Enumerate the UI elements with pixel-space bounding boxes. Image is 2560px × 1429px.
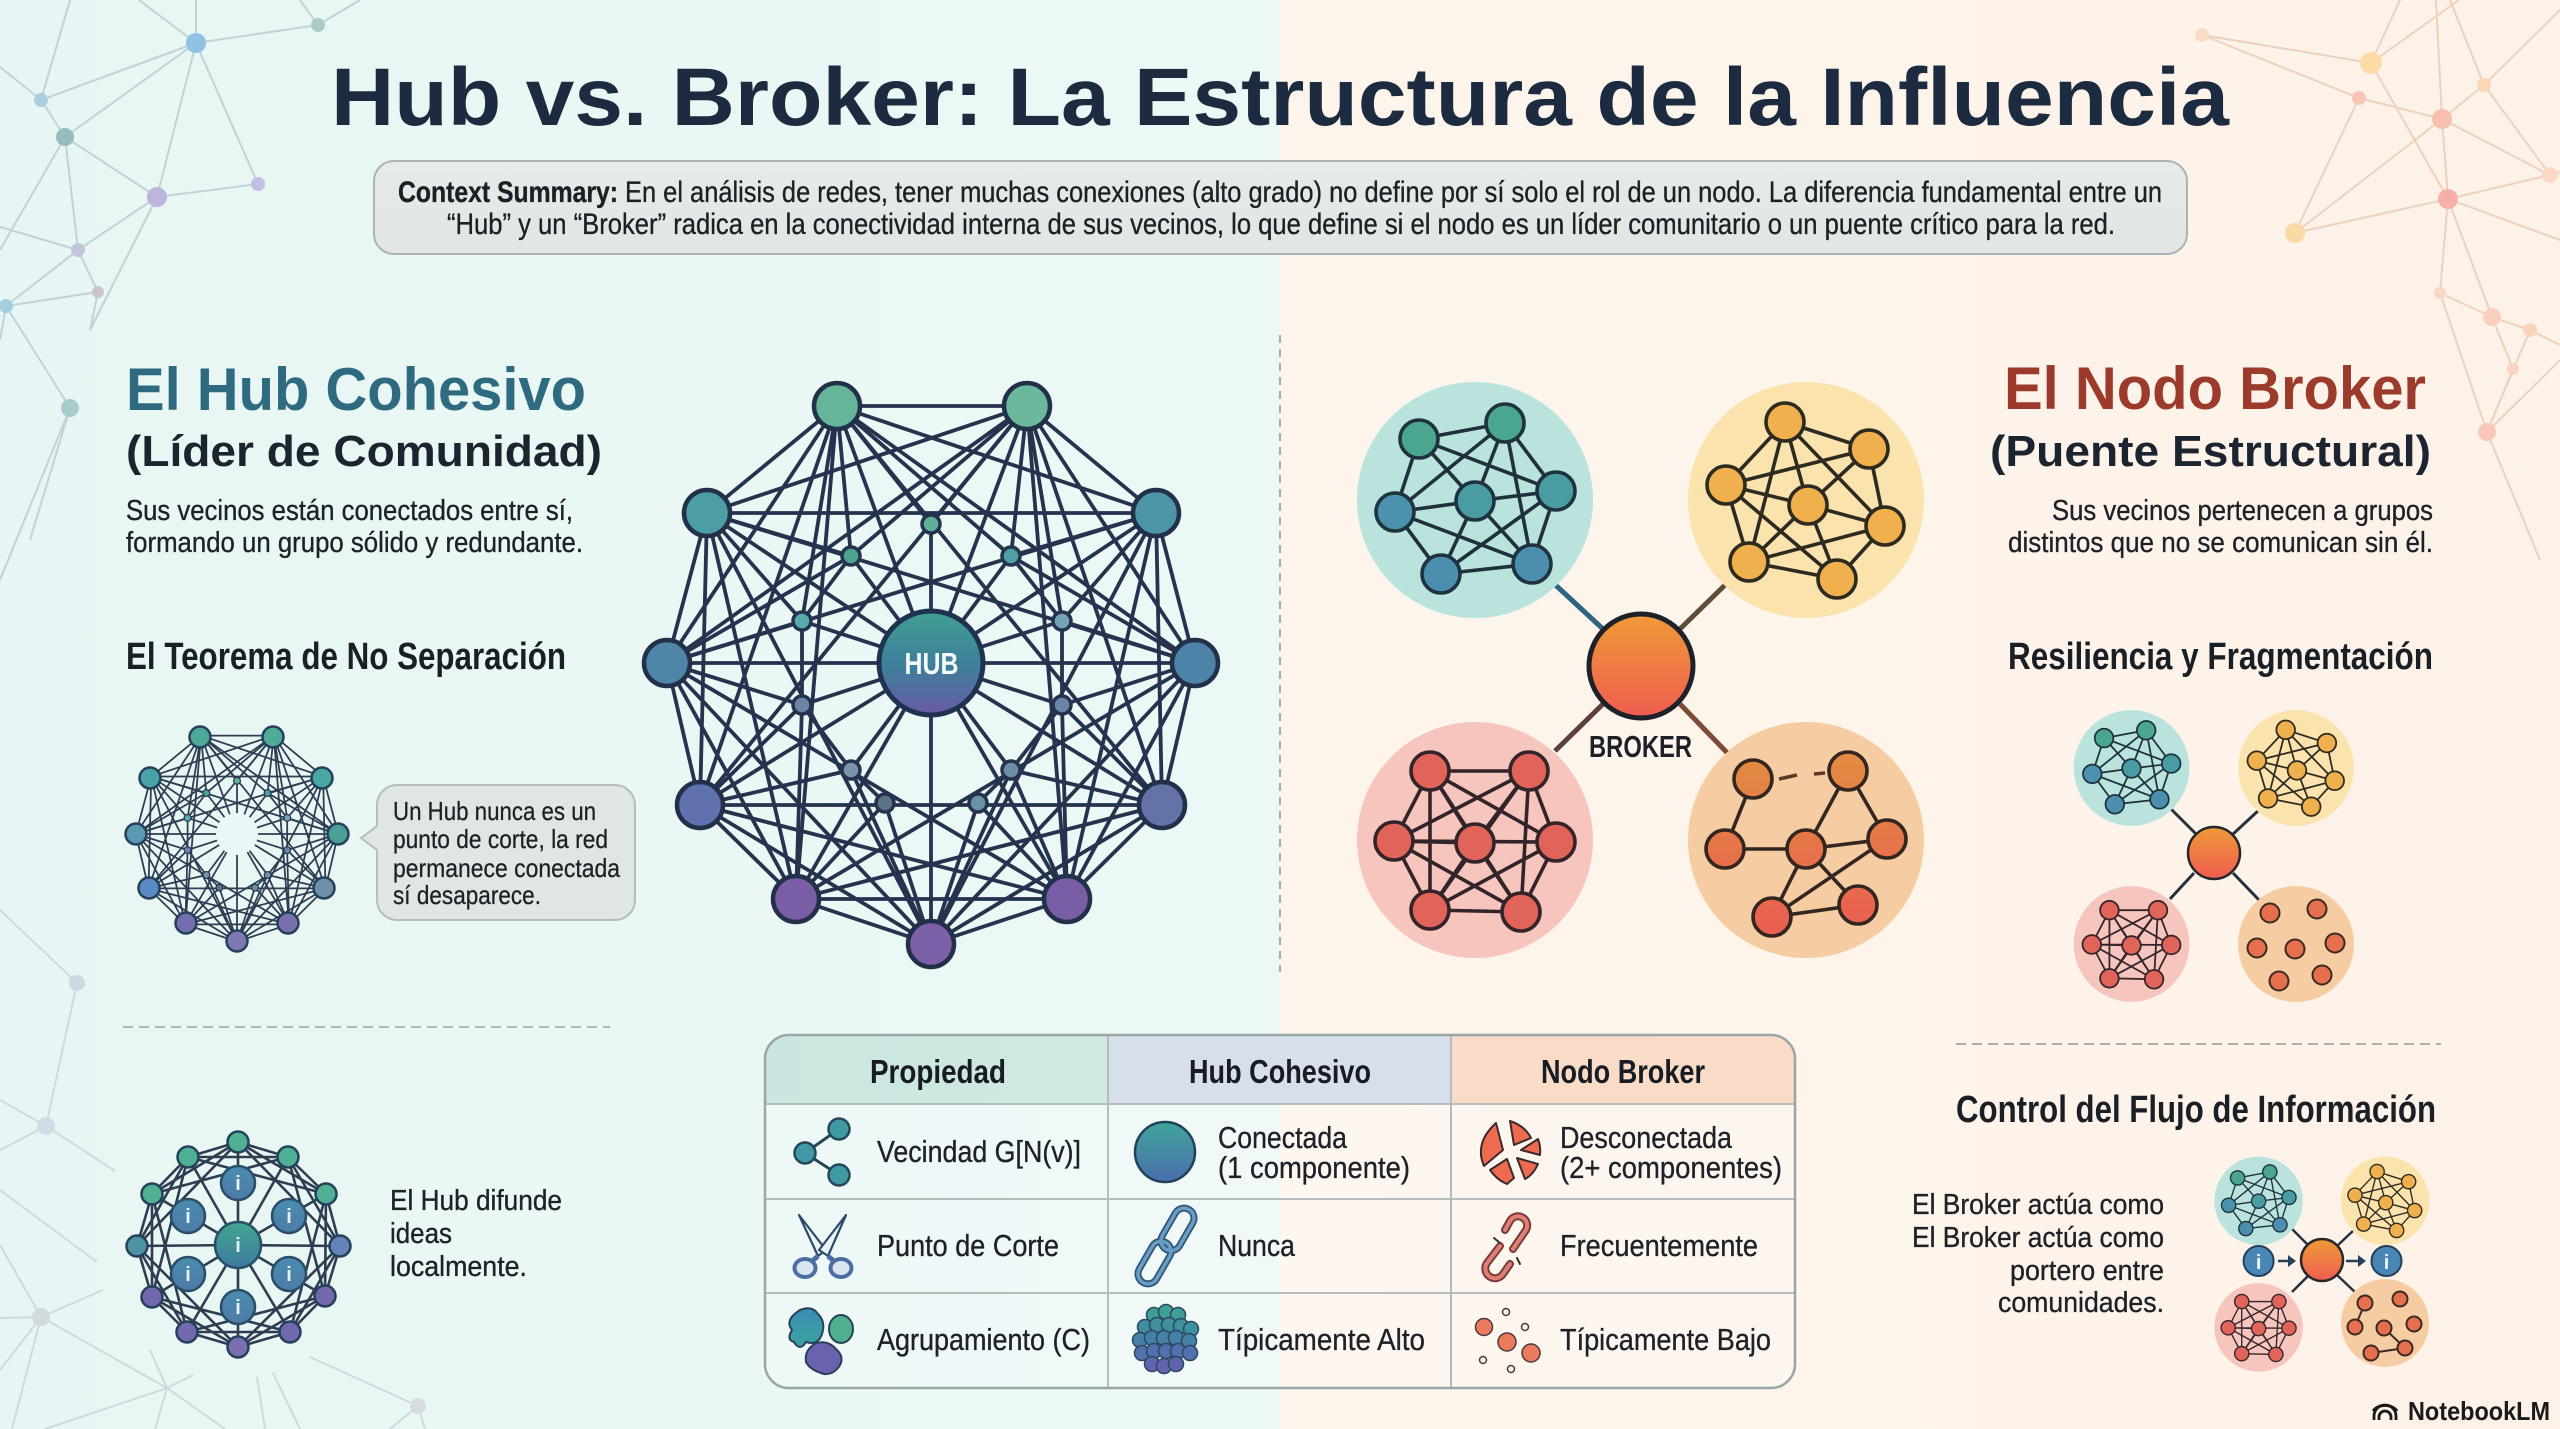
decorative network: top right <box>2195 0 2560 560</box>
row: Vecindad: Vecindad G[N(v)] <box>877 1134 1081 1169</box>
heading: Control del Flujo de Información: Control del Flujo de Información <box>1956 1089 2436 1131</box>
row: Agrupamiento: Agrupamiento (C) <box>877 1322 1090 1357</box>
chart: hub diffusing information <box>126 1132 350 1358</box>
chart: main hub network <box>644 383 1218 967</box>
chart: broker controlling information flow <box>2214 1157 2429 1372</box>
table header row <box>765 1035 1795 1104</box>
heading: El Teorema de No Separación: El Teorema de No Separación <box>126 636 566 678</box>
text: El Broker actúa como portero: portero entre <box>2010 1255 2164 1287</box>
text: El Broker actúa como portero: El Broker actúa como <box>1912 1189 2164 1221</box>
text: El Hub difunde ideas localmente: localmente. <box>390 1251 527 1283</box>
context summary box: Context Summary: <box>398 176 618 209</box>
icon: fragmented circle <box>1481 1121 1540 1184</box>
icon: chain link <box>1134 1204 1198 1288</box>
icon: solid circle <box>1135 1122 1195 1182</box>
icon: info arrow in <box>2244 1246 2296 1276</box>
row: Punto de Corte: Punto de Corte <box>877 1228 1059 1263</box>
chart: hub diffusing information: i <box>235 1297 241 1319</box>
text: El Hub difunde ideas localmente: El Hub difunde <box>390 1185 562 1217</box>
text: El Broker actúa como portero: El Broker actúa como <box>1912 1222 2164 1254</box>
icon: dense cluster <box>1132 1304 1198 1374</box>
row: Vecindad: Conectada <box>1218 1120 1348 1155</box>
chart: broker removed, fragmented resilience <box>2074 710 2354 1002</box>
chart: hub diffusing information: i <box>185 1206 191 1228</box>
icon: three blobs <box>789 1308 853 1374</box>
row: Vecindad: (2+ componentes) <box>1560 1150 1782 1185</box>
panel: El Nodo Broker header: Sus vecinos pertenecen a grupos <box>2052 495 2433 527</box>
icon: share nodes <box>794 1118 850 1186</box>
cluster: orange fragmented <box>1688 722 1924 958</box>
callout: Un Hub nunca es un punto de corte: permanece conectada <box>393 853 620 883</box>
icon: scattered dots <box>1476 1308 1540 1372</box>
chart: small hub with hub removed <box>126 726 348 952</box>
panel: El Nodo Broker header <box>1990 355 2433 559</box>
chart: main broker network: BROKER <box>1589 729 1692 764</box>
chart: main hub network: HUB <box>904 646 958 681</box>
decorative network: bottom left <box>0 910 426 1429</box>
center vertical divider <box>1279 335 1281 972</box>
text: El Broker actúa como portero: comunidades. <box>1998 1287 2164 1319</box>
context summary box: “Hub” y un “Broker” radica en la conectividad interna de sus vecinos, lo que define si el nodo es un líder comunitario o un puente crítico para la red. <box>447 208 2115 241</box>
row: Punto de Corte <box>794 1204 1758 1288</box>
row: Vecindad: Desconectada <box>1560 1120 1733 1155</box>
callout: Un Hub nunca es un punto de corte: sí desaparece. <box>393 880 541 910</box>
table body background <box>765 1035 1795 1388</box>
callout: Un Hub nunca es un punto de corte <box>361 785 635 920</box>
panel: El Hub Cohesivo header: formando un grupo sólido y redundante. <box>126 527 583 559</box>
row: Agrupamiento: Típicamente Alto <box>1218 1322 1425 1357</box>
panel: El Nodo Broker header: distintos que no se comunican sin él. <box>2008 527 2433 559</box>
panel: El Nodo Broker header: (Puente Estructural) <box>1990 427 2431 476</box>
callout: Un Hub nunca es un punto de corte: Un Hub nunca es un <box>393 796 596 826</box>
chart: hub diffusing information: i <box>235 1235 241 1257</box>
chart: hub diffusing information: i <box>235 1173 241 1195</box>
panel: El Hub Cohesivo header <box>126 356 602 559</box>
table header row: Propiedad <box>870 1053 1006 1090</box>
text: El Hub difunde ideas localmente <box>390 1185 562 1283</box>
chart: hub diffusing information: i <box>185 1264 191 1286</box>
right horizontal divider <box>1956 1043 2441 1045</box>
row: Agrupamiento <box>789 1304 1771 1374</box>
row: Vecindad: (1 componente) <box>1218 1150 1410 1185</box>
row: Punto de Corte: Frecuentemente <box>1560 1228 1758 1263</box>
callout: Un Hub nunca es un punto de corte: punto de corte, la red <box>393 824 608 854</box>
panel: El Hub Cohesivo header: El Hub Cohesivo <box>126 356 586 423</box>
left horizontal divider <box>123 1026 610 1028</box>
row: Punto de Corte: Nunca <box>1218 1228 1296 1263</box>
panel: El Hub Cohesivo header: (Líder de Comunidad) <box>126 427 602 476</box>
heading: Resiliencia y Fragmentación: Resiliencia y Fragmentación <box>2008 636 2433 678</box>
icon: info arrow out: i <box>2384 1252 2389 1274</box>
table: comparison <box>765 1035 1795 1388</box>
chart: main broker network <box>1357 382 1924 958</box>
context summary box: En el análisis de redes, tener muchas conexiones (alto grado) no define por sí solo el rol de un nodo. La diferencia fundamental entre un <box>625 176 2162 209</box>
table header row: Nodo Broker <box>1541 1053 1705 1090</box>
context summary box <box>374 161 2187 254</box>
title: Hub vs. Broker: La Estructura de la Influencia <box>331 52 2230 143</box>
chart: hub diffusing information: i <box>286 1206 292 1228</box>
icon: scissors <box>794 1215 852 1277</box>
text: El Hub difunde ideas localmente: ideas <box>390 1218 452 1250</box>
icon: broken chain <box>1485 1216 1527 1278</box>
icon: info arrow out <box>2346 1246 2402 1276</box>
icon: info arrow in: i <box>2256 1252 2261 1274</box>
decorative network: top left <box>0 0 360 580</box>
panel: El Hub Cohesivo header: Sus vecinos están conectados entre sí, <box>126 495 573 527</box>
panel: El Nodo Broker header: El Nodo Broker <box>2004 355 2426 422</box>
text: El Broker actúa como portero <box>1912 1189 2164 1319</box>
table header row: Hub Cohesivo <box>1189 1053 1371 1090</box>
row: Agrupamiento: Típicamente Bajo <box>1560 1322 1771 1357</box>
row: Vecindad <box>794 1118 1782 1186</box>
chart: hub diffusing information: i <box>286 1264 292 1286</box>
cluster: small orange <box>2341 1279 2429 1367</box>
